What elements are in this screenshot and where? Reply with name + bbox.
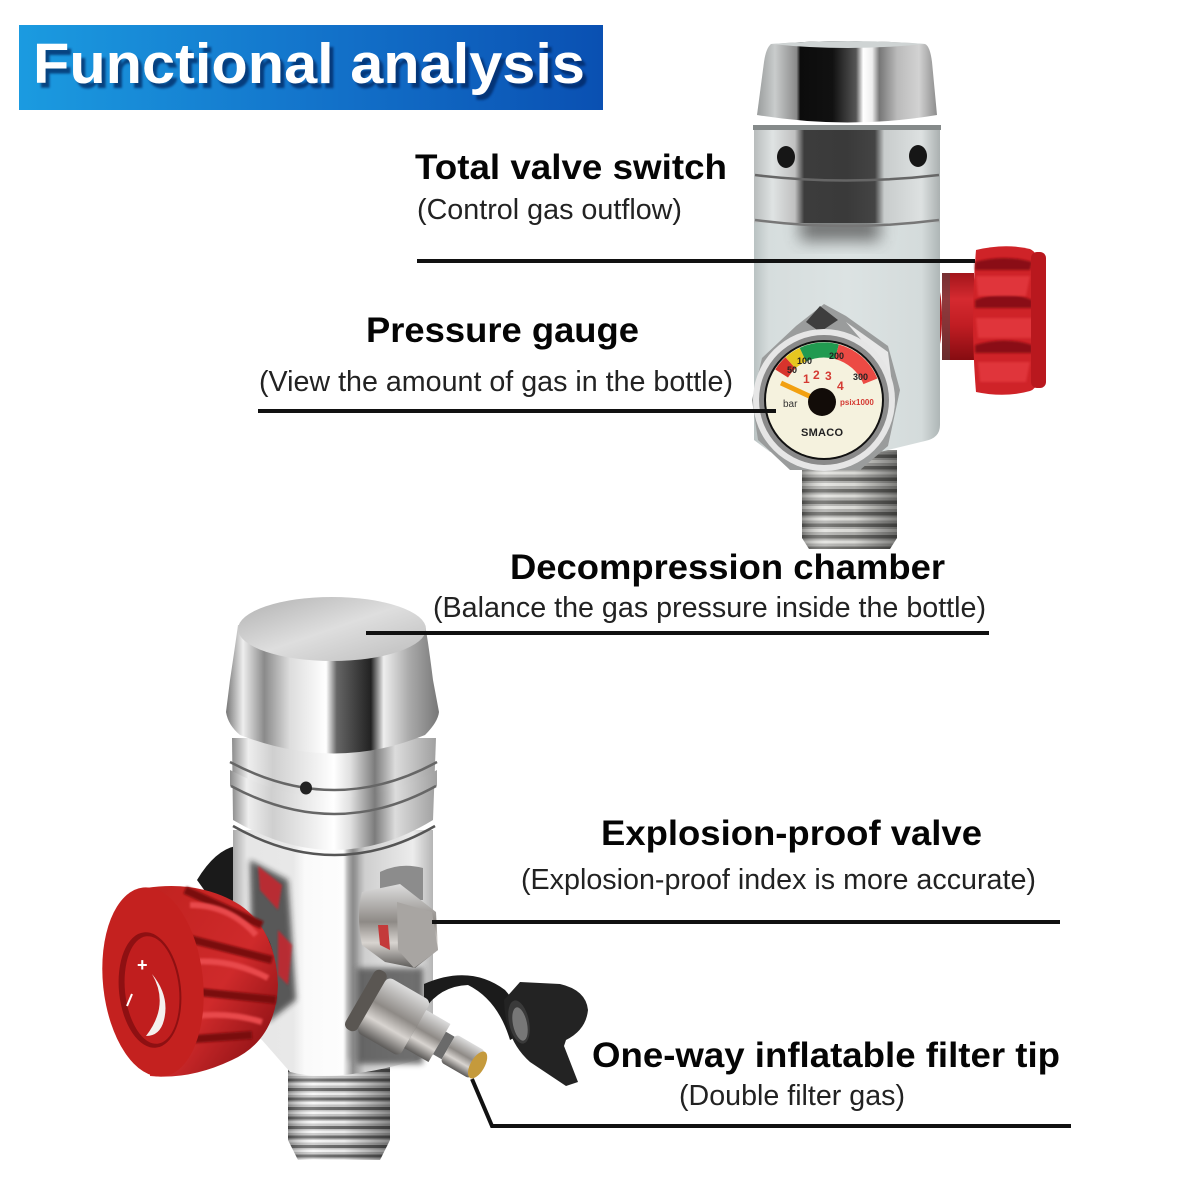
- label: one-way inflatable filter tip: [472, 1036, 1071, 1126]
- upper valve thread: [802, 450, 897, 549]
- pressure gauge: 2: [813, 368, 820, 382]
- title banner: Functional analysis: [33, 32, 585, 96]
- lower valve thread: [288, 1060, 390, 1160]
- title banner: [19, 25, 603, 110]
- upper valve body shadow: [800, 215, 880, 241]
- pressure gauge: 100: [797, 356, 812, 366]
- pressure gauge: 300: [853, 372, 868, 382]
- body reflection: [250, 840, 356, 1060]
- label: explosion-proof valve: (Explosion-proof index is more accurate): [521, 864, 1036, 896]
- label: pressure gauge: Pressure gauge: [366, 311, 639, 350]
- lower valve photo: [93, 597, 588, 1160]
- pressure gauge: 3: [825, 369, 832, 383]
- dark fitting behind knob: [197, 846, 236, 905]
- label: explosion-proof valve: Explosion-proof valve: [601, 814, 982, 853]
- pressure gauge: bar: [783, 399, 798, 410]
- label: one-way inflatable filter tip: One-way inflatable filter tip: [592, 1036, 1060, 1075]
- label: pressure gauge: (View the amount of gas in the bottle): [259, 366, 733, 398]
- upper valve photo: [752, 41, 1046, 549]
- lower valve red knob: +: [137, 955, 148, 975]
- upper valve red knob: [920, 246, 1046, 395]
- pressure gauge: 50: [787, 365, 797, 375]
- lower valve red knob: [93, 882, 278, 1082]
- filter tip connector: [343, 968, 501, 1098]
- upper valve collar: [753, 125, 941, 226]
- pressure gauge: [752, 304, 900, 471]
- label: total valve switch: Total valve switch: [415, 148, 727, 187]
- pressure gauge: 200: [829, 351, 844, 361]
- upper valve body: [754, 215, 940, 452]
- label: pressure gauge: [258, 311, 776, 413]
- label: explosion-proof valve: [432, 814, 1060, 924]
- label: decompression chamber: (Balance the gas pressure inside the bottle): [433, 592, 986, 624]
- label: total valve switch: [415, 148, 975, 263]
- lower valve cap: [226, 597, 439, 754]
- pressure gauge: 1: [803, 372, 810, 386]
- pressure gauge: psix1000: [840, 398, 874, 407]
- upper valve cap: [757, 41, 937, 122]
- label: one-way inflatable filter tip: (Double filter gas): [679, 1080, 905, 1112]
- title banner: Functional analysis: [37, 37, 589, 101]
- pressure gauge: 4: [837, 379, 844, 393]
- label: decompression chamber: Decompression chamber: [510, 548, 945, 587]
- pressure gauge: SMACO: [801, 427, 843, 439]
- label: decompression chamber: [366, 548, 989, 635]
- lower valve body: [233, 830, 433, 1076]
- lower valve collar: [230, 738, 437, 855]
- explosion-proof valve: [357, 866, 438, 1064]
- label: total valve switch: (Control gas outflow): [417, 194, 682, 226]
- rubber cover strap: [424, 975, 588, 1086]
